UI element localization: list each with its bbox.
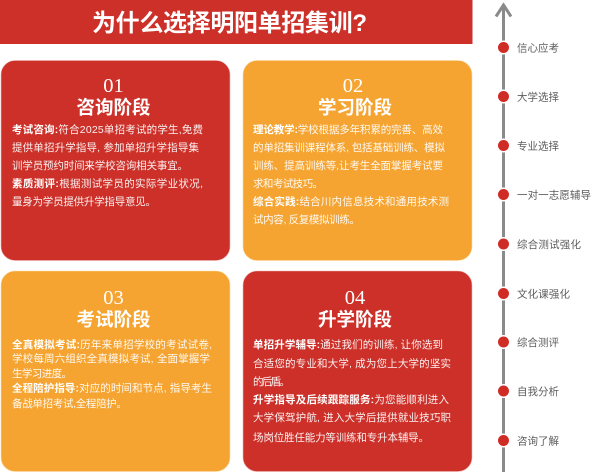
- exam text: 全真模拟考试:历年来单招学校的考试试卷,: [12, 338, 212, 351]
- timeline step: 自我分析: [496, 384, 560, 398]
- consultation text: [12, 123, 203, 208]
- panel: consultation stage: [1, 60, 230, 260]
- timeline step: 大学选择: [496, 90, 560, 104]
- panel: study stage: [243, 60, 472, 260]
- timeline step: 一对一志愿辅导: [496, 188, 591, 202]
- stage heading: 考试阶段: [76, 309, 151, 330]
- timeline step: 大学选择: 大学选择: [517, 90, 560, 104]
- advancement text: [253, 338, 452, 444]
- study text: 的单招集训课程体系, 包括基础训练、模拟: [253, 141, 446, 154]
- advancement text: 大学保驾护航, 进入大学后提供就业技巧职: [253, 411, 452, 424]
- timeline step: 综合测评: [496, 335, 560, 349]
- study text: 求和考试技巧。: [253, 177, 323, 190]
- timeline step: 专业选择: 专业选择: [517, 140, 560, 152]
- advancement text: 的后盾。: [253, 375, 290, 388]
- header banner: [0, 0, 472, 44]
- stage heading: 学习阶段: [318, 97, 392, 118]
- timeline step: 咨询了解: [496, 434, 560, 448]
- timeline step: 自我分析: 自我分析: [517, 385, 560, 398]
- stage heading: 升学阶段: [318, 309, 392, 330]
- timeline step: 信心应考: 信心应考: [517, 42, 559, 54]
- timeline step: 咨询了解: 咨询了解: [517, 434, 560, 448]
- panel: exam stage: [1, 271, 230, 472]
- stage number 02: 02: [343, 75, 363, 97]
- timeline step: 文化课强化: 文化课强化: [517, 288, 570, 300]
- exam text: 生学习进度。: [12, 367, 72, 380]
- timeline step: 综合测评: 综合测评: [517, 336, 560, 349]
- exam text: [12, 338, 212, 410]
- advancement text: 场岗位胜任能力等训练和专升本辅导。: [253, 431, 429, 444]
- study text: [253, 123, 449, 226]
- consultation text: 提供单招升学指导, 参加单招升学指导集: [12, 141, 200, 154]
- study text: 训练、提高训练等,让考生全面掌握考试要: [253, 159, 443, 172]
- consultation text: 考试咨询:符合2025单招考试的学生,免费: [12, 123, 203, 136]
- consultation text: 量身为学员提供升学指导意见。: [12, 195, 156, 208]
- timeline: [496, 5, 591, 472]
- study text: 综合实践:结合川内信息技术和通用技术测: [253, 195, 449, 208]
- stage heading: 咨询阶段: [76, 97, 151, 118]
- consultation text: 素质测评:根据测试学员的实际学业状况,: [12, 177, 203, 190]
- timeline step: 综合测试强化: [496, 237, 582, 251]
- timeline step: 综合测试强化: 综合测试强化: [517, 238, 582, 251]
- stage number 04: 04: [345, 287, 365, 309]
- title: 为什么选择明阳单招集训?: [92, 10, 367, 37]
- timeline axis arrow: [496, 5, 511, 472]
- exam text: 学校每周六组织全真模拟考试, 全面掌握学: [12, 352, 210, 365]
- timeline step: 信心应考: [496, 40, 559, 54]
- study text: 试内容, 反复模拟训练。: [253, 213, 360, 226]
- stage number 01: 01: [103, 75, 124, 97]
- advancement text: 升学指导及后续跟踪服务:为您能顺利进入: [253, 393, 450, 406]
- panel: advancement stage: [243, 271, 472, 472]
- advancement text: 合适您的专业和大学, 成为您上大学的坚实: [253, 357, 451, 370]
- stage number 03: 03: [103, 287, 124, 309]
- study text: 理论教学:学校根据多年积累的完善、高效: [253, 123, 444, 136]
- timeline step: 一对一志愿辅导: 一对一志愿辅导: [517, 188, 591, 202]
- exam text: 全程陪护指导:对应的时间和节点, 指导考生: [12, 382, 212, 394]
- exam text: 备战单招考试,全程陪护。: [12, 397, 127, 410]
- timeline step: 专业选择: [496, 138, 560, 152]
- advancement text: 单招升学辅导:通过我们的训练, 让你选到: [253, 338, 443, 351]
- timeline step: 文化课强化: [496, 286, 570, 300]
- consultation text: 训学员预约时间来学校咨询相关事宜。: [12, 159, 188, 172]
